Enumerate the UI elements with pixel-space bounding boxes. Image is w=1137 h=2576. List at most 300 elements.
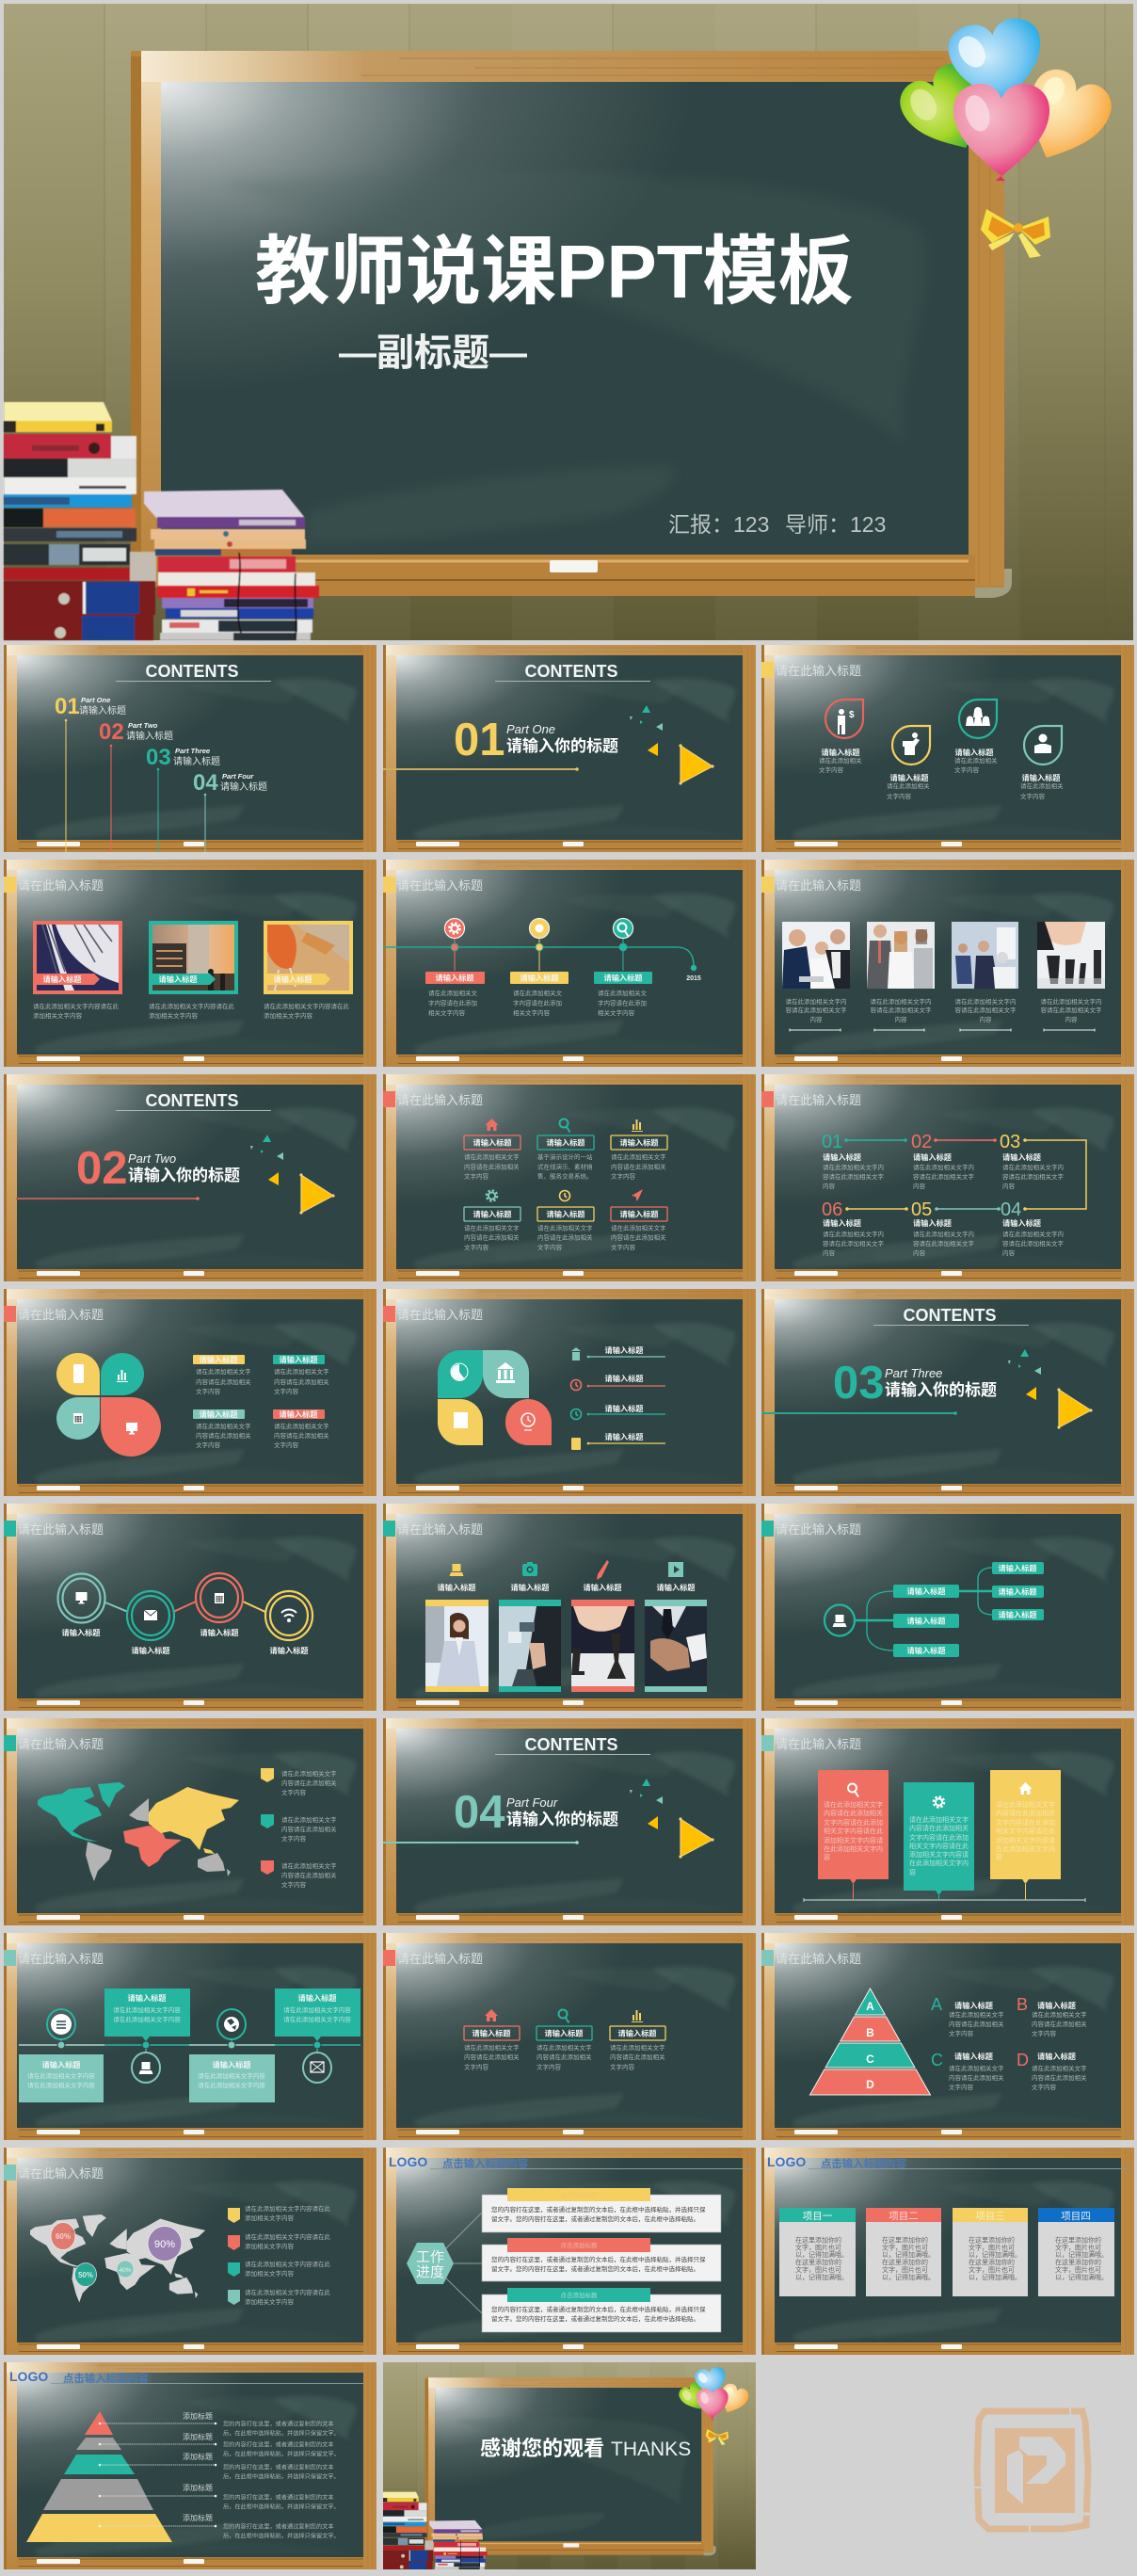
card 1: 以，记得加满哦。 — [795, 2250, 848, 2259]
box 3: 请在此添加相关文字内容 — [198, 2081, 265, 2089]
petal yellow — [56, 1353, 100, 1395]
step 03: 容请在此添加相关文字 — [1002, 1172, 1064, 1181]
card yellow: 在此添加相关文字内 — [996, 1844, 1055, 1853]
node C: 请输入标题 — [907, 1646, 945, 1655]
panel: four image columns — [383, 1504, 756, 1711]
axis — [19, 2044, 360, 2046]
petal teal — [101, 1353, 144, 1395]
card teal: 文字内容请在此添加 — [909, 1833, 969, 1842]
title tab — [761, 1091, 774, 1107]
feature 1: 内容请在此添加相关 — [464, 1162, 520, 1171]
hexagon: 工作 — [416, 2249, 444, 2265]
card 4: 以，记得加满哦。 — [1055, 2250, 1108, 2259]
bracket rules — [790, 1028, 1095, 1032]
shape yellow — [438, 1399, 483, 1445]
node A — [893, 1585, 959, 1598]
feature 3: 请输入标题 — [618, 2028, 656, 2037]
node B — [893, 1614, 959, 1628]
chalkboard — [383, 1289, 756, 1496]
box 2: 点击添加标题 — [561, 2241, 598, 2249]
card teal — [904, 1782, 974, 1900]
legend teal — [273, 1355, 329, 1395]
chalkboard — [761, 1074, 1134, 1281]
node teal: 请输入标题 — [604, 974, 642, 983]
row 4 — [571, 1432, 665, 1450]
slide title: 请在此输入标题 — [397, 1522, 483, 1537]
node red: 请输入标题 — [436, 974, 473, 983]
box 1: 您的内容打在这里，或者通过复制您的文本后，在此框中选择粘贴，并选择只保 — [491, 2205, 706, 2214]
step 05: 容请在此添加相关文字 — [913, 1239, 975, 1248]
tier text: 您的内容打在这里，或者通过复制您的文本 — [223, 2463, 334, 2471]
item 04: 04 — [193, 770, 218, 796]
item A: A — [931, 1995, 942, 2014]
step 01 — [822, 1132, 885, 1190]
text column 2: 文字内容 — [887, 792, 911, 800]
feature 2: 基于演示设计的一站 — [537, 1152, 593, 1161]
chalkboard — [761, 1289, 1134, 1496]
item 03 — [146, 745, 220, 852]
card red: 内容请在此添加相关 — [824, 1809, 883, 1817]
legend light teal — [193, 1409, 251, 1449]
feature 4: 请输入标题 — [473, 1209, 511, 1218]
card 3: 在这里添加你的 — [969, 2258, 1015, 2266]
item A: 内容请在此添加相关 — [949, 2020, 1004, 2028]
row 1 — [571, 1345, 665, 1360]
item B: 请输入标题 — [1037, 2001, 1076, 2010]
node 4: mail — [303, 2041, 331, 2083]
ring 3 — [196, 1573, 243, 1622]
feature 3: 内容请在此添加相关 — [611, 1162, 666, 1171]
heading: CONTENTS — [145, 1091, 239, 1110]
title tab — [761, 662, 774, 678]
card red: 文字内容请在此添加 — [824, 1818, 883, 1827]
captions: 内容 — [979, 1015, 992, 1023]
step 04: 请输入标题 — [1002, 1218, 1041, 1228]
feature 6: 请输入标题 — [620, 1209, 658, 1218]
legend 3: 内容请在此添加相关 — [281, 1871, 337, 1879]
box 2 — [104, 1988, 190, 2041]
hexagon — [407, 2243, 454, 2284]
box 2: 请输入标题 — [128, 1993, 166, 2003]
chalkboard — [761, 2148, 1134, 2355]
row 3: 请输入标题 — [605, 1404, 643, 1413]
feature 3: 文字内容 — [610, 2062, 634, 2071]
watermark stamp — [977, 2411, 1088, 2529]
section title: 请输入你的标题 — [885, 1380, 997, 1399]
baseline — [804, 1898, 1085, 1902]
feature 5: 内容请在此添加相关 — [537, 1233, 593, 1241]
captions: 容请在此添加相关文字 — [954, 1006, 1017, 1014]
card 2: 项目二 — [889, 2211, 919, 2222]
legend 3: 请在此添加相关文字内容请在此 — [245, 2260, 331, 2268]
bubble 50% — [75, 2263, 96, 2286]
box 3: 点击添加标题 — [561, 2291, 598, 2299]
item 02: Part Two — [128, 721, 158, 730]
panel: tree diagram — [761, 1504, 1134, 1711]
chalkboard — [383, 645, 756, 852]
panel: five tier pyramid — [4, 2362, 376, 2569]
captions: 内容 — [809, 1015, 823, 1023]
captions: 容请在此添加相关文字 — [1041, 1006, 1102, 1014]
item C: 请在此添加相关文字 — [949, 2064, 1004, 2072]
step 01: 01 — [822, 1132, 842, 1152]
text column 2 — [887, 773, 930, 800]
column 1: woman in suit — [425, 1600, 488, 1692]
year marker — [686, 965, 701, 982]
legend 2: 内容请在此添加相关 — [281, 1825, 337, 1833]
pyramid: B — [866, 2026, 874, 2039]
cover illustration: wood wall, chalkboard, balloons and books — [4, 4, 1133, 640]
step 02: 容请在此添加相关文字 — [913, 1172, 975, 1181]
card captions: 添加相关文字内容 — [33, 1011, 83, 1020]
photo 4: chess pieces — [1037, 922, 1105, 989]
heading rule — [116, 681, 271, 682]
box 1: 请在此添加相关文字内容 — [27, 2081, 95, 2089]
feature 1: 请在此添加相关文字 — [464, 1152, 520, 1161]
slide title: 请在此输入标题 — [18, 1737, 104, 1751]
panel: three photo cards — [4, 860, 376, 1067]
legend yellow — [193, 1355, 251, 1395]
box 2: 请在此添加相关文字内容 — [113, 2005, 181, 2014]
feature 3: 请在此添加相关文字 — [610, 2043, 665, 2052]
panel: timeline — [383, 860, 756, 1067]
step 03: 请在此添加相关文字内 — [1002, 1163, 1064, 1171]
card 1: 在这里添加你的 — [795, 2258, 841, 2266]
card teal: 添加相关文字内容请 — [909, 1850, 969, 1859]
leaf 3 — [992, 1609, 1044, 1620]
legend 2: 请在此添加相关文字 — [281, 1815, 337, 1824]
node teal: 请在此添加相关文 — [598, 989, 648, 997]
panel: cover slide — [4, 4, 1133, 640]
item 02 — [99, 719, 173, 852]
ring 1 — [58, 1574, 105, 1623]
photo card teal: 请输入标题 — [159, 974, 197, 984]
heading rule — [873, 1325, 1029, 1326]
title tab — [4, 1735, 16, 1751]
node red: 相关文字内容 — [428, 1008, 465, 1017]
title tab — [4, 2165, 16, 2181]
title tab — [761, 1521, 774, 1537]
box 1: 留文字。您的内容打在这里，或者通过复制您的文本后，在此框中选择粘贴。 — [491, 2214, 699, 2223]
teardrop red — [825, 700, 863, 738]
bubble 90%: 90% — [154, 2239, 175, 2250]
card 2: 以，记得加满哦。 — [882, 2250, 935, 2259]
feature 2: 请输入标题 — [545, 2028, 583, 2037]
panel: four teardrops — [761, 645, 1134, 852]
heading: CONTENTS — [525, 662, 617, 681]
presenter info: 导师：123 — [785, 512, 886, 537]
feature 6: 内容请在此添加相关 — [611, 1233, 666, 1241]
card yellow: 请在此添加相关文字 — [996, 1800, 1055, 1809]
item 04: 请输入标题 — [220, 781, 267, 793]
legend red — [273, 1409, 329, 1449]
card 4: 以，记得加满哦。 — [1055, 2273, 1108, 2281]
card 1: 以，记得加满哦。 — [795, 2273, 848, 2281]
feature 2: 内容请在此添加相关 — [536, 2053, 592, 2061]
chalkboard — [4, 1504, 376, 1711]
world map — [30, 2214, 205, 2302]
slide title: 请在此输入标题 — [776, 1522, 861, 1537]
node 3: globe — [217, 2009, 246, 2049]
slide title: 请在此输入标题 — [397, 878, 483, 893]
slide title: 请在此输入标题 — [776, 1093, 861, 1107]
item D — [1017, 2051, 1087, 2091]
item B: 文字内容 — [1032, 2029, 1056, 2037]
node 2: laptop — [132, 2041, 160, 2083]
title tab — [4, 1521, 16, 1537]
item C: 内容请在此添加相关 — [949, 2073, 1004, 2082]
column 2: touch screen — [499, 1600, 561, 1692]
feature 1: 请在此添加相关文字 — [464, 2043, 520, 2052]
heading: CONTENTS — [525, 1735, 617, 1754]
photo card yellow — [264, 921, 353, 994]
step 02 — [911, 1132, 975, 1190]
legend yellow: 请在此添加相关文字 — [196, 1367, 251, 1376]
step 01: 内容 — [823, 1182, 836, 1190]
subtitle: —副标题— — [339, 332, 527, 374]
box 2: 您的内容打在这里，或者通过复制您的文本后，在此框中选择粘贴，并选择只保 — [491, 2255, 706, 2263]
heading: CONTENTS — [145, 662, 239, 681]
title tab — [761, 1735, 774, 1751]
feature 1: 请输入标题 — [473, 1137, 511, 1147]
section label: Part Three — [885, 1366, 942, 1380]
step 05: 请输入标题 — [913, 1218, 952, 1228]
step 05: 05 — [911, 1199, 932, 1220]
card red: 添加相关文字内容请 — [824, 1836, 883, 1844]
card captions: 添加相关文字内容 — [149, 1011, 198, 1020]
node A: 请输入标题 — [907, 1586, 945, 1596]
card captions: 请在此添加相关文字内容请在此 — [264, 1002, 350, 1010]
card red — [818, 1770, 889, 1900]
node yellow: 请在此添加相关文 — [513, 989, 563, 997]
item B — [1017, 1995, 1087, 2037]
section title: 请输入你的标题 — [506, 1810, 618, 1828]
section number: 01 — [454, 715, 505, 765]
legend light teal: 文字内容 — [196, 1441, 220, 1449]
chalkboard — [383, 1504, 756, 1711]
shape light teal — [483, 1350, 529, 1398]
step 01: 请输入标题 — [823, 1152, 861, 1162]
legend yellow: 文字内容 — [196, 1387, 220, 1395]
feature 4: 请在此添加相关文字 — [464, 1224, 520, 1232]
title tab — [383, 1521, 395, 1537]
logo and heading: LOGO — [389, 2154, 427, 2169]
chalkboard — [761, 1718, 1134, 1925]
photo 2: three colleagues — [867, 922, 935, 989]
item A: 文字内容 — [949, 2029, 973, 2037]
world map — [38, 1782, 239, 1881]
branch connectors — [856, 1568, 992, 1650]
node yellow — [510, 919, 568, 1017]
row 2 — [570, 1374, 665, 1390]
item B: B — [1017, 1995, 1028, 2014]
legend teal: 请输入标题 — [280, 1355, 317, 1364]
node teal — [594, 919, 652, 1017]
card 2: 在这里添加你的 — [882, 2258, 928, 2266]
feature 3: 文字内容 — [611, 1171, 636, 1181]
column 3: chess move — [571, 1600, 634, 1692]
card yellow — [990, 1770, 1061, 1900]
text column 3: 请输入标题 — [955, 748, 993, 757]
chalkboard — [761, 1504, 1134, 1711]
row 2: 请输入标题 — [605, 1374, 643, 1383]
title tab — [383, 877, 395, 893]
chalkboard — [761, 1933, 1134, 2140]
captions: 容请在此添加相关文字 — [785, 1006, 847, 1014]
title tab — [761, 877, 774, 893]
text column 1: 请输入标题 — [822, 748, 859, 757]
item C: 文字内容 — [949, 2083, 973, 2091]
card 1: 文字，图片也可 — [795, 2265, 841, 2274]
section title: 请输入你的标题 — [128, 1166, 240, 1184]
logo and heading: LOGO — [767, 2154, 806, 2169]
feature 2: 请在此添加相关文字 — [536, 2043, 592, 2052]
item A: 请在此添加相关文字 — [949, 2010, 1004, 2019]
photo 3: meeting room — [952, 922, 1018, 989]
leaf 2: 请输入标题 — [999, 1587, 1036, 1597]
node red — [425, 919, 485, 1017]
box 1: 点击添加标题 — [561, 2190, 598, 2199]
card teal: 容 — [909, 1868, 916, 1876]
chalkboard — [4, 2362, 376, 2569]
panel: four petal diagram — [4, 1289, 376, 1496]
item 03: Part Three — [175, 747, 210, 755]
chalkboard — [383, 1074, 756, 1281]
photo card red — [33, 921, 122, 994]
ring labels — [62, 1628, 308, 1655]
panel: world map percentages — [4, 2148, 376, 2355]
logo and heading: 点击输入标题内容 — [442, 2157, 529, 2170]
item 04: Part Four — [222, 772, 254, 781]
captions: 请在此添加相关文字内 — [954, 997, 1017, 1006]
card teal: 内容请在此添加相关 — [909, 1824, 969, 1832]
panel: four project cards — [761, 2148, 1134, 2355]
legend red: 文字内容 — [274, 1441, 299, 1449]
item D: 请在此添加相关文字 — [1032, 2064, 1087, 2072]
legend teal: 文字内容 — [274, 1387, 299, 1395]
panel: section 01 — [383, 645, 756, 852]
node teal: 字内容请在此添加 — [598, 998, 647, 1007]
text column 1: 文字内容 — [819, 765, 843, 774]
panel: six step process — [761, 1074, 1134, 1281]
chalkboard — [4, 645, 376, 852]
node yellow: 字内容请在此添加 — [513, 998, 562, 1007]
feature 5: 文字内容 — [537, 1243, 563, 1251]
ring labels: 请输入标题 — [270, 1646, 308, 1655]
heading rule — [116, 1110, 271, 1111]
feature 1 — [464, 1119, 520, 1181]
card red: 请在此添加相关文字 — [824, 1800, 883, 1809]
step 06: 容请在此添加相关文字 — [823, 1239, 885, 1248]
step 01: 容请在此添加相关文字 — [823, 1172, 885, 1181]
card 1: 文字，图片也可 — [795, 2243, 841, 2252]
legend yellow: 内容请在此添加相关 — [196, 1377, 251, 1386]
thanks message: THANKS — [611, 2439, 691, 2460]
legend 1: 添加相关文字内容 — [245, 2214, 294, 2222]
legend light teal: 请输入标题 — [200, 1409, 237, 1419]
ring 4 — [265, 1591, 312, 1640]
legend yellow: 请输入标题 — [200, 1355, 237, 1364]
item 01: 请输入标题 — [79, 704, 126, 716]
leaf 1 — [992, 1562, 1044, 1574]
panel: four petal list — [383, 1289, 756, 1496]
leader dots — [99, 2423, 216, 2527]
panel: section 03 — [761, 1289, 1134, 1496]
pyramid: A — [866, 2000, 874, 2013]
triangles — [630, 705, 714, 785]
card 3: 文字，图片也可 — [969, 2243, 1015, 2252]
petal light teal — [56, 1397, 100, 1440]
card 3: 在这里添加你的 — [969, 2235, 1015, 2245]
box 3 — [482, 2288, 721, 2332]
ring labels: 请输入标题 — [200, 1628, 238, 1637]
panel: section 02 — [4, 1074, 376, 1281]
section number: 03 — [833, 1358, 885, 1409]
heading rule — [495, 681, 650, 682]
feature 3: 请在此添加相关文字 — [611, 1152, 666, 1161]
slide title: 请在此输入标题 — [776, 1737, 861, 1751]
step 03: 请输入标题 — [1002, 1152, 1041, 1162]
step 05: 内容 — [913, 1248, 926, 1257]
chalkboard — [383, 2148, 756, 2355]
tier text: 后，在此框中选择粘贴，并选择只保留文字。 — [223, 2533, 340, 2540]
feature 2 — [536, 2009, 592, 2071]
heading rule — [495, 1754, 650, 1755]
row 1: 请输入标题 — [605, 1345, 643, 1355]
ring labels: 请输入标题 — [62, 1628, 100, 1637]
chalkboard — [761, 645, 1134, 852]
card yellow: 相关文字内容请在此 — [996, 1827, 1055, 1835]
triangles — [1008, 1349, 1093, 1429]
teardrop yellow — [892, 726, 930, 765]
item C: 请输入标题 — [954, 2052, 993, 2061]
slide title: 请在此输入标题 — [18, 1952, 104, 1966]
legend 2: 文字内容 — [281, 1834, 307, 1843]
item 01: Part One — [81, 696, 110, 704]
box 4: 请输入标题 — [298, 1993, 336, 2003]
row 3 — [570, 1404, 665, 1420]
slide title: 请在此输入标题 — [776, 1952, 861, 1966]
leaf 1: 请输入标题 — [999, 1563, 1036, 1572]
timeline line — [383, 947, 694, 966]
captions: 请在此添加相关文字内 — [1041, 997, 1101, 1006]
legend 3: 请在此添加相关文字 — [281, 1861, 337, 1870]
step 06 — [822, 1199, 885, 1257]
item A: 请输入标题 — [954, 2001, 993, 2010]
teardrop teal — [959, 700, 997, 738]
text column 4: 文字内容 — [1020, 792, 1045, 800]
card 4: 文字，图片也可 — [1055, 2243, 1101, 2252]
bubble 60% — [51, 2222, 75, 2250]
card captions: 请在此添加相关文字内容请在此 — [33, 1002, 119, 1010]
feature 3 — [611, 1119, 667, 1181]
tier titles: 添加标题 — [183, 2483, 213, 2492]
year marker: 2015 — [686, 975, 701, 982]
row 4: 请输入标题 — [605, 1432, 643, 1441]
card teal: 请在此添加相关文字 — [909, 1815, 969, 1824]
item 02: 请输入标题 — [126, 730, 173, 742]
card teal: 相关文字内容请在此 — [909, 1842, 969, 1850]
column icons and labels: 请输入标题 — [511, 1583, 549, 1592]
text column 2: 请在此添加相关 — [887, 781, 930, 790]
step 02: 请输入标题 — [913, 1152, 952, 1162]
title tab — [4, 1950, 16, 1966]
bubble 40%: 40% — [119, 2267, 132, 2274]
title: 教师说课PPT模板 — [255, 230, 854, 314]
panel: work progress — [383, 2148, 756, 2355]
node yellow: 请输入标题 — [520, 974, 558, 983]
feature 3: 内容请在此添加相关 — [610, 2053, 665, 2061]
